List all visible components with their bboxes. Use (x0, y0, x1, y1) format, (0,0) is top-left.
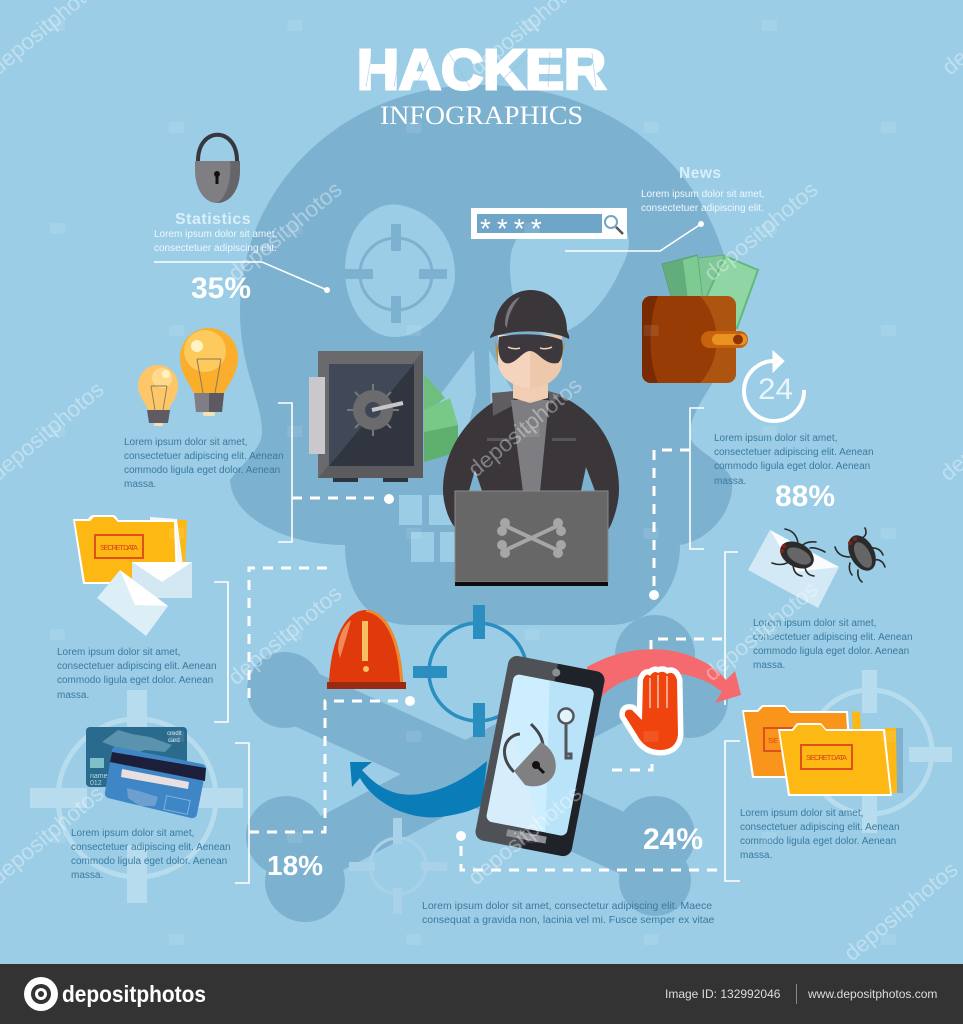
icon: bugs on envelope (748, 528, 885, 608)
text: bottom paragraph (422, 900, 715, 926)
text: bugs paragraph (753, 618, 913, 671)
search bar: **** (480, 213, 548, 244)
text: cards paragraph: consectetuer adipiscing elit. Aenean (71, 842, 231, 853)
text: cards paragraph: commodo ligula eget dolor. Aenean (71, 856, 227, 867)
icon: credit cards (86, 727, 206, 818)
watermarks: depositphotos (463, 373, 587, 482)
text: right paragraph: Lorem ipsum dolor sit amet, (714, 433, 837, 444)
stat: 24%: 24% (643, 823, 703, 856)
watermarks: depositphotos (463, 781, 587, 890)
text: right paragraph (714, 433, 874, 487)
heading: news: Lorem ipsum dolor sit amet, (641, 189, 764, 200)
text: bulbs paragraph: consectetuer adipiscing elit. Aenean (124, 451, 284, 462)
heading: news: News (679, 165, 722, 182)
heading: news (641, 165, 764, 214)
icon: stop hand (625, 672, 678, 750)
skull eyes and nose (345, 204, 629, 562)
footer logo (24, 977, 206, 1011)
icon: phone (474, 654, 606, 858)
text: right folders paragraph: massa. (740, 850, 772, 861)
icon: padlock (195, 135, 240, 203)
icon: left folder with envelopes: SECRET DATA (100, 543, 138, 552)
text: cards paragraph: massa. (71, 870, 103, 881)
connector lines (154, 221, 740, 883)
target crosshair (413, 605, 527, 737)
icon: safe (309, 351, 423, 482)
footer bar (0, 964, 963, 1024)
watermarks: depositphotos (223, 581, 347, 690)
icon: credit cards: card (168, 738, 180, 744)
text: bulbs paragraph: massa. (124, 479, 156, 490)
icon: alarm siren (327, 610, 406, 689)
heading: news: consectetuer adipiscing elit. (641, 203, 764, 214)
red arrow (587, 649, 741, 707)
heading: statistics: consectetuer adipiscing elit. (154, 243, 277, 254)
stat: 88%: 88% (775, 480, 835, 513)
blue arrow (350, 761, 487, 817)
text: bugs paragraph: consectetuer adipiscing elit. Aenean (753, 632, 913, 643)
text: right folders paragraph (740, 808, 900, 861)
watermarks: depositphotos (223, 177, 347, 286)
title: HACKER (357, 38, 606, 102)
text: right folders paragraph: Lorem ipsum dolor sit amet, (740, 808, 863, 819)
title (357, 38, 606, 130)
light crosshair left (30, 690, 243, 903)
text: left folder paragraph: massa. (57, 690, 89, 701)
text: bottom paragraph: consequat a gravida non, lacinia vel mi. Fusce semper ex vitae (422, 914, 715, 926)
text: bugs paragraph: commodo ligula eget dolor. Aenean (753, 646, 909, 657)
icon: right folders (742, 705, 903, 796)
text: right folders paragraph: commodo ligula eget dolor. Aenean (740, 836, 896, 847)
icon: wallet with money (642, 255, 758, 383)
icon: credit cards: name (90, 773, 108, 780)
watermarks: depositphotos (839, 857, 963, 966)
search bar (471, 208, 627, 244)
icon: money behind safe (424, 374, 458, 462)
text: right paragraph: massa. (714, 476, 746, 487)
watermarks: depositphotos (699, 177, 823, 286)
title: INFOGRAPHICS (380, 101, 583, 130)
icon: right folders: SE (768, 736, 778, 745)
text: right paragraph: consectetuer adipiscing elit. Aenean (714, 447, 874, 458)
text: cards paragraph (71, 828, 231, 881)
icon: credit cards: 012 (90, 780, 102, 787)
heading: statistics: Statistics (175, 211, 251, 228)
text: bulbs paragraph: commodo ligula eget dolor. Aenean (124, 465, 280, 476)
hacker figure (443, 290, 619, 530)
footer bar: www.depositphotos.com (807, 987, 937, 1001)
watermarks: depositphotos (699, 577, 823, 686)
icon: key on phone (558, 708, 574, 758)
text: left folder paragraph: consectetuer adipiscing elit. Aenean (57, 661, 217, 672)
text: left folder paragraph: commodo ligula eget dolor. Aenean (57, 675, 213, 686)
footer bar: Image ID: 132992046 (665, 987, 781, 1001)
text: bulbs paragraph: Lorem ipsum dolor sit amet, (124, 437, 247, 448)
skull background (230, 85, 735, 922)
text: bugs paragraph: massa. (753, 660, 785, 671)
icon: 24 hour arrow (744, 351, 804, 421)
icon: credit cards: credit (167, 731, 182, 737)
heading: statistics (154, 211, 277, 305)
footer logo: depositphotos (62, 981, 206, 1007)
text: cards paragraph: Lorem ipsum dolor sit amet, (71, 828, 194, 839)
icon: open lock on phone (504, 724, 556, 786)
light crosshair right (790, 670, 952, 833)
icon: right folders: SECRET DATA (806, 753, 847, 762)
text: left folder paragraph (57, 647, 217, 701)
stat: 18%: 18% (267, 850, 323, 881)
heading: statistics: 35% (191, 272, 251, 305)
crosshair in eye (345, 224, 447, 323)
text: bugs paragraph: Lorem ipsum dolor sit amet, (753, 618, 876, 629)
laptop with crossbones (455, 491, 608, 586)
text: left folder paragraph: Lorem ipsum dolor sit amet, (57, 647, 180, 658)
text: right folders paragraph: consectetuer adipiscing elit. Aenean (740, 822, 900, 833)
text: bottom paragraph: Lorem ipsum dolor sit amet, consectetur adipiscing elit. Maece (422, 900, 712, 912)
light crosshair bottom (349, 818, 447, 914)
text: bulbs paragraph (124, 437, 284, 490)
icon: 24 hour arrow: 24 (758, 373, 793, 406)
icon: left folder with envelopes (73, 515, 192, 636)
icon: light bulbs (138, 328, 238, 426)
heading: statistics: Lorem ipsum dolor sit amet, (154, 229, 277, 240)
text: right paragraph: commodo ligula eget dolor. Aenean (714, 461, 870, 472)
